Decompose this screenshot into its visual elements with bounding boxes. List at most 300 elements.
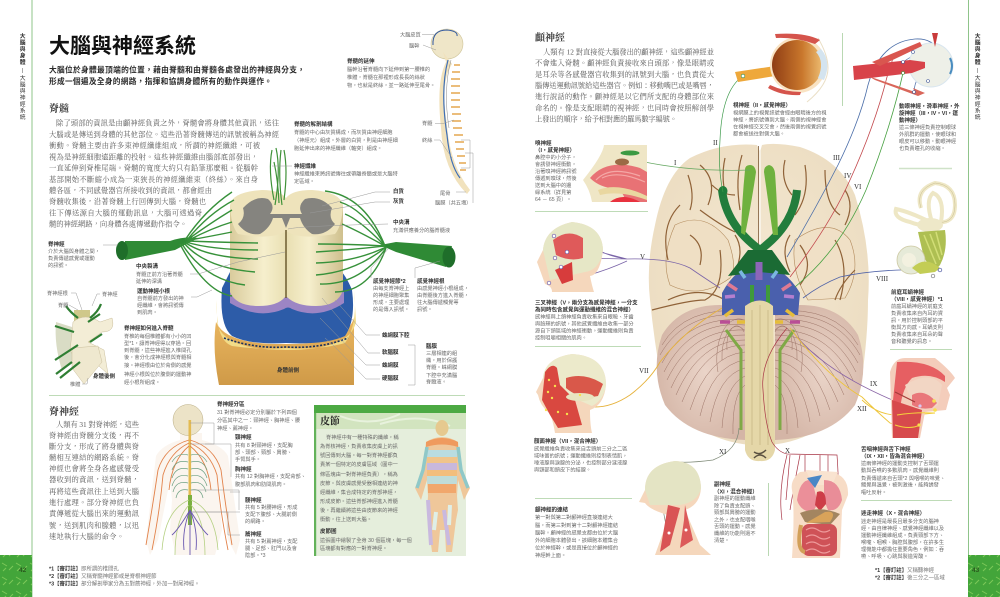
caption: glossopharyngeal: （IX，XII，皆為混合神經）: [861, 452, 928, 460]
page tab 42: 42: [19, 567, 27, 574]
pons: [722, 262, 800, 315]
heading: cranial nerves: 顱神經: [535, 31, 565, 44]
caption: anterior fissure: 脊髓正前方沿著脊髓: [136, 270, 183, 278]
caption: trigeminal: 感神經與上頜神經負責收集來自眼瞼、牙齒: [535, 312, 634, 320]
thoracic: 腹部肌肉和肋間肌肉。: [235, 480, 287, 488]
text: spinal nerves: 再將這些資訊往上送到大腦: [49, 487, 140, 496]
caption: white matter, grey matter, central canal: 中央溝: [393, 218, 410, 226]
caption: accessory nerve: 舌頭的運動。感覺: [714, 522, 756, 530]
left sidebar: [0, 0, 32, 597]
text: spinal cord: 視為是神經細胞遠距離的投射。這些神經纖維由腦部底部發出，: [49, 152, 258, 162]
panel: dermatomes: [314, 405, 470, 556]
thoracic: 胸神經: [235, 465, 252, 473]
text: spinal nerves: 進行處理。部分脊神經也負: [49, 498, 140, 507]
caption: sensory ganglion: [371, 248, 410, 313]
caption: olfactory nerve: （I，感覺神經）: [535, 146, 575, 154]
cord column: [230, 205, 343, 306]
sidebar chapter label left: 經: [20, 100, 26, 108]
caption: oculomotor: 這三條神經負責控制眼球: [899, 123, 957, 131]
caption: dermatome figure: 這張圖中繪製了全身 30 個區塊，每一個: [320, 536, 412, 544]
caption: meninges labels: 織，用於保護: [426, 356, 458, 364]
vertebral tissue: [215, 318, 354, 385]
label: body front: 身體前側: [277, 366, 300, 374]
caption: sensory ganglion: 的是傳入訊號。: [373, 305, 409, 313]
sacral: 共有 5 對薦神經，支配: [245, 537, 298, 545]
caption: meninges labels: 蛛網膜下腔: [382, 331, 410, 339]
caption: nerve fibers: 定區域。: [294, 177, 315, 185]
illustration: side view of spine and brain: [400, 29, 473, 206]
thoracic: [235, 465, 306, 488]
right sidebar: [968, 0, 1000, 597]
cerebrum: [649, 144, 869, 445]
caption: cranial connections: 外的細胞本體發出，該細胞本體集合: [535, 536, 619, 544]
caption: dermatome figure: 皮節圖: [320, 527, 337, 535]
footnotes left: *2【審訂註】又稱脊髓神經節或是脊根神經節: [49, 572, 157, 580]
caption: nerve fibers: 神經纖維: [294, 162, 317, 170]
roman numeral labels: XII: [857, 405, 867, 413]
VII: [580, 308, 722, 407]
caption: vagus: 經，由自律神經、感覺神經纖維以及: [861, 524, 944, 532]
text: dermatomes: 經纖維，集合成特定的脊部神經，: [320, 488, 398, 496]
caption: trigeminal: [535, 298, 638, 342]
grey matter: [238, 198, 335, 234]
X: [763, 328, 838, 527]
text: spinal nerves: 速地執行大腦的命令。: [49, 532, 124, 541]
heading: spinal nerves: 脊神經: [49, 405, 79, 418]
illustration: throat: [890, 358, 955, 438]
caption: accessory nerve: （XI，混合神經）: [714, 488, 758, 496]
text: cranial nerves: 人類有 12 對直接從大腦發出的顱神經，這些顱神經並: [543, 48, 714, 56]
caption: motor rootlets: 自脊髓前方發出的神: [137, 294, 184, 302]
caption: facial nerve: 感覺纖維負責收集來自舌頭前三分之二區: [534, 444, 627, 452]
illustration: brain underside: [649, 144, 869, 461]
footnotes left: [49, 564, 200, 588]
I: [640, 161, 750, 170]
illustration: neck head: [639, 461, 711, 555]
sidebar chapter label right: 腦: [975, 38, 981, 46]
caption: motor rootlets: 運動神經小根: [137, 287, 171, 295]
dorsal rootlets: [270, 148, 286, 205]
footnotes left: *1【審訂註】即所謂的椎間孔: [49, 564, 119, 572]
caption: vestibulocochlear: 前庭耳蝸神經: [891, 288, 925, 296]
nerve connector lines: [549, 39, 940, 540]
labels: vertebra: 身體後側: [93, 372, 116, 380]
caption: cranial connections: 腦幹。顱神經的感覺支都由位於大腦: [535, 528, 618, 536]
caption: spinal cord extension: 腦幹沿著脊髓向下延伸到第一腰椎的: [347, 65, 430, 73]
title: 大腦與神經系統: [49, 34, 196, 58]
caption: accessory nerve: 除了負責支配頭、: [714, 502, 756, 510]
olfactory nerves: [741, 165, 778, 235]
roman numeral labels: VI: [854, 183, 862, 191]
cervical: 頸神經: [235, 433, 252, 441]
caption: facial nerve: 域味蕾的訊號；運動纖維則控制表情肌，: [534, 452, 627, 460]
caption: white matter, grey matter, central canal: [288, 187, 451, 234]
roman numeral labels: III: [833, 154, 841, 162]
captions: spinal nerve regions: [217, 400, 306, 559]
caption: how nerves enter: 後，會分化成神經根與脊髓相: [124, 353, 191, 361]
roman numeral labels: VII: [639, 367, 649, 375]
labels: spine: 脊髓: [422, 119, 432, 127]
footnotes left: *3【審訂註】部分解剖學家分為五對薦神經，外加一對尾神經。: [49, 580, 200, 588]
caption: dermatome figure: [320, 527, 412, 552]
text: spinal cord: 體各區，不同感覺器官所接收到的資訊，都會經由: [49, 186, 212, 195]
caption: spinal nerve: 介於大腦與身體之間，: [48, 247, 100, 255]
caption: accessory nerve: 纖維的功能則還不: [714, 529, 756, 537]
caption: anatomy of cord: [294, 120, 398, 152]
text: spinal cord: 大腦或是傳送到身體的其他部位。這些沿著脊髓傳送的訊號被稱為神經: [49, 130, 280, 139]
caption: glossopharyngeal: 負責傳遞來自舌頭*2 與咽喉的味覺、: [861, 474, 945, 482]
caption: vagus: 嚥、呼吸、心跳與製造胃酸。: [861, 552, 928, 560]
caption: glossopharyngeal: 嘔吐反射。: [861, 488, 887, 496]
caption: trigeminal: 為同時包含感覺與運動纖維的混合神經）: [535, 306, 634, 314]
caption: meninges labels: 脊髓。蛛網膜: [426, 363, 457, 371]
caption: how nerves enter: 脊椎的每個椎體都有小小的凹: [124, 332, 191, 340]
caption: motor rootlets: 經纖維，會將訊號傳: [137, 301, 185, 309]
sulci: [652, 155, 855, 310]
text: cranial nerves: 是耳朵等各感覺器官收集到的訊號到大腦，也負責從大: [535, 70, 715, 79]
caption: vagus: [861, 509, 945, 560]
caption: oculomotor: 外肌群的運動，使眼球和: [899, 130, 956, 138]
caption: meninges labels: 下腔中充滿腦: [426, 371, 457, 379]
footnotes right: *2【審訂註】後三分之一區域: [875, 574, 945, 582]
caption: vestibulocochlear: 音和聽覺的訊息。: [891, 337, 933, 345]
sidebar chapter label right: 大: [975, 74, 981, 82]
sidebar chapter label right: 身: [975, 52, 981, 60]
caption: accessory nerve: 副神經: [714, 480, 731, 488]
text: dermatomes: 後，再繼續將這些由皮節來的神經: [320, 506, 398, 514]
caption: meninges labels: 三層相連的組: [426, 349, 457, 357]
caption: anatomy of cord: 胞延伸出來的神經纖維（軸突）組成。: [294, 144, 382, 152]
lumbar: 支配下腹部、大腿前側: [245, 510, 297, 518]
text: dermatomes: 皮節。與皮膚感覺受器相連結的神: [320, 479, 398, 487]
caption: meninges labels: 脊髓液。: [426, 378, 447, 386]
caption: oculomotor: 旋神經（III，IV，VI，運: [899, 109, 958, 117]
text: spinal cord: 往下傳送源自大腦的運動訊息，大腦可透過脊: [49, 208, 202, 218]
caption: motor rootlets: 到肌肉。: [137, 308, 158, 316]
caption: how nerves enter: 脊神經如何進入脊髓: [124, 324, 174, 332]
caption: sensory ganglion: 由每支脊神經上: [373, 284, 409, 292]
caption: meninges labels: [320, 298, 458, 386]
caption: vestibulocochlear: 負責收集來自耳朵的聲: [891, 330, 943, 338]
sidebar chapter label right: 腦: [975, 80, 981, 88]
caption: spinal cord extension: 椎體，脊髓在那裡形成長長的絲狀: [347, 73, 426, 81]
roman numeral labels: IV: [844, 172, 851, 180]
caption: optic nerve: 視神經（II，感覺神經）: [733, 101, 791, 109]
illustration: head trigeminal: [537, 222, 603, 292]
spinal nerve regions intro: 神經、薦神經。: [217, 424, 253, 432]
caption: accessory nerve: 頸部與肩膀的運動: [714, 508, 756, 516]
text: spinal nerves: 責傳遞從大腦出來的運動訊: [49, 509, 139, 518]
sidebar chapter label left: 腦: [20, 80, 26, 88]
left spinal nerve: [116, 192, 258, 296]
temporal lobes: [666, 220, 734, 291]
caption: olfactory nerve: 傳遞到嗅球，然後: [535, 174, 577, 182]
caption: accessory nerve: 之外，也支配咽喉: [714, 516, 756, 524]
sidebar chapter label right: [975, 32, 981, 121]
sidebar chapter label left: 體: [20, 58, 26, 66]
caption: anatomy of cord: 脊髓的解剖結構: [294, 120, 333, 128]
roman numeral labels: IX: [870, 380, 877, 388]
caption: how nerves enter: 型*1，讓脊神經得以穿過。回: [124, 339, 191, 347]
caption: spinal nerve: 脊神經: [48, 240, 65, 248]
caption: optic nerve: 都會被送往對側大腦。: [733, 130, 785, 138]
roman numeral labels: [639, 139, 889, 456]
caption: glossopharyngeal: 動與吞嚥的多數肌肉。感覺纖維則: [861, 466, 939, 474]
lumbar: 共有 5 對腰神經，形成: [245, 503, 297, 511]
lumbar: [245, 496, 297, 525]
heading: dermatomes: 皮節: [320, 414, 340, 428]
sidebar chapter label left: 神: [20, 94, 26, 102]
caption: vestibulocochlear: 前庭耳蝸神經的前庭支: [891, 302, 943, 310]
caption: vestibulocochlear: 負責收集來自內耳的資: [891, 309, 943, 317]
caption: spinal cord extension: [347, 57, 435, 89]
optic chiasm and tracts: [722, 190, 797, 250]
caption: vestibulocochlear: （VIII，感覺神經）*1: [891, 295, 943, 303]
caption: spinal nerve: [48, 240, 118, 269]
caption: how nerves enter: 到脊髓，這些神經進入椎間孔: [124, 346, 192, 354]
text: spinal nerves: 器收到的資訊，送到脊髓，: [49, 475, 139, 484]
cerebellum: [657, 305, 745, 440]
caption: oculomotor: 也負責瞳孔的收縮。: [899, 144, 946, 152]
caption: sensory ganglion: 形成，主要處理: [373, 298, 410, 306]
caption: vagus: 迷走神經（X，混合神經）: [861, 509, 925, 517]
caption: glossopharyngeal: 舌咽神經與舌下神經: [861, 445, 911, 453]
caption: sensory root: [415, 261, 469, 313]
brainstem: [745, 300, 775, 461]
caption: anterior fissure: 中央裂溝: [136, 262, 159, 270]
cervical: 手臂與手。: [235, 455, 261, 463]
text: cranial nerves: 進行說話的動作。顱神經是以它們所支配的身體部位來: [535, 92, 715, 101]
illustration: spinal cord cross-section: [116, 148, 456, 385]
caption: anterior fissure: 延伸的深溝: [136, 277, 162, 285]
text: dermatomes: 責某一個特定的皮膚區域（圖中一: [320, 460, 398, 468]
caption: motor rootlets: [137, 287, 212, 316]
labels: spine: [400, 30, 473, 206]
text: spinal cord: [49, 118, 280, 228]
caption: glossopharyngeal: 觸覺與溫覺，被刺激後，能夠誘發: [861, 480, 939, 488]
caption: cranial connections: 位於神經幹，或是直接位於顱神經的: [535, 544, 618, 552]
caption: olfactory nerve: 會誘發神經衝動，: [535, 160, 577, 168]
sidebar chapter label right: 與: [975, 45, 981, 53]
intro text: [49, 64, 305, 86]
caption: oculomotor: 動眼神經，滑車神經，外: [899, 102, 960, 110]
lumbar: 的網路。: [245, 517, 266, 525]
footnotes right: [875, 566, 945, 582]
caption: anatomy of cord: （神經元）組成。外層的白質，則是由神經細: [294, 136, 398, 144]
roman numeral labels: VIII: [876, 275, 889, 283]
cervical: 部、頭部、頸部、肩膀、: [235, 448, 292, 456]
spinal nerve regions intro: 分區其中之一：頸神經、胸神經、腰: [217, 416, 300, 424]
sidebar chapter label right: 經: [975, 100, 981, 108]
illustration: eye optic: [735, 34, 828, 102]
captions: spinal cord left: [48, 240, 285, 386]
caption: nerve fibers: 神經纖維束將訊號傳往或帶離脊髓或是大腦特: [294, 170, 398, 178]
illustration: eye muscles: [853, 33, 953, 96]
caption: cranial connections: 第一對與第二對顱神經直接連結大: [535, 513, 613, 521]
caption: oculomotor: 動神經）: [899, 116, 921, 124]
caption: olfactory nerve: 緣系統（詳見第: [535, 188, 571, 196]
caption: optic nerve: 神經，將訊號傳到大腦。兩側的視神經會: [733, 116, 827, 124]
thoracic: 共有 12 對胸神經，支配背部、: [235, 472, 306, 480]
text: spinal nerves: 斷分支，形成了將身體與脊: [49, 442, 139, 451]
IX: [790, 328, 897, 402]
roman numeral labels: X: [785, 447, 790, 455]
caption: anatomy of cord: 脊髓的中心由灰質構成，而灰質由神經細胞: [294, 128, 393, 136]
pia band: [230, 292, 344, 313]
cervical: [235, 433, 293, 463]
caption: meninges labels: 軟腦膜: [382, 348, 399, 356]
caption: olfactory nerve: 送到大腦中的邊: [535, 181, 572, 189]
text: spinal nerves: 號，送到肌肉和腺體，以迅: [49, 521, 140, 530]
caption: glossopharyngeal: 這兩條神經的運動支控制了舌頭運: [861, 459, 940, 467]
text: dermatomes: 脊神經中有一種特殊的纖維，稱: [326, 433, 399, 441]
sidebar chapter label left: [20, 32, 26, 121]
text: spinal nerves: 人類有 31 對脊神經，這些: [56, 420, 139, 429]
caption: nerve fibers: [272, 162, 398, 185]
labels: vertebra: 脊神經根: [47, 289, 68, 297]
V: [549, 236, 720, 288]
lumbar: 腰神經: [245, 496, 262, 504]
text: cranial nerves: 不會進入脊髓。顱神經負責接收來自頭部，像是眼睛或: [535, 58, 715, 68]
caption: optic nerve: [733, 101, 827, 138]
caption: anterior fissure: [136, 252, 285, 285]
caption: vagus: 理機能中都擔任重要角色，例如：吞: [861, 545, 945, 553]
text: spinal cord: 脊髓收集後，沿著脊髓上行回傳到大腦，脊髓也: [49, 197, 206, 206]
caption: spinal nerve: 的訊號。: [48, 261, 69, 269]
caption: vestibulocochlear: 衡與方向感。耳蝸支則: [891, 323, 943, 331]
text: dermatomes: 形成皮節。這些脊部神經進入脊髓: [320, 497, 398, 505]
caption: accessory nerve: [714, 480, 758, 544]
sidebar chapter label left: 統: [20, 113, 26, 121]
sidebar chapter label right: 神: [975, 94, 981, 102]
caption: how nerves enter: 接。神經根由位於背側的感覺: [124, 361, 191, 369]
heading: spinal cord: 脊髓: [49, 102, 69, 115]
caption: spinal cord extension: 脊髓的延伸: [347, 57, 375, 65]
II: [719, 76, 743, 192]
text: spinal nerves: 脊神經由脊髓分支後，再不: [49, 431, 140, 440]
caption: spinal cord extension: 物，也就是終絲，並一路延伸至尾骨。: [347, 81, 435, 89]
caption: olfactory nerve: 鼻腔中的小分子，: [535, 153, 577, 161]
caption: facial nerve: 顏面神經（VII，混合神經）: [534, 437, 601, 445]
VI: [795, 73, 903, 287]
caption: how nerves enter: 經小根所組成。: [124, 378, 160, 386]
sidebar chapter label left: 身: [20, 52, 26, 60]
sidebar chapter label right: 系: [975, 106, 981, 114]
caption: facial nerve: 與頸部和頭皮下的結腺。: [534, 466, 591, 474]
sidebar chapter label left: 與: [20, 45, 26, 53]
labels: vertebra: 椎體: [70, 380, 80, 388]
text: spinal cord: 一直延伸到脊椎尾端。脊髓的寬度大約只有鉛筆那麼粗。從腦幹: [49, 164, 259, 172]
caption: olfactory nerve: 64 － 65 頁）。: [535, 196, 572, 203]
caption: sensory ganglion: 的神經細胞聚集: [373, 291, 409, 299]
caption: trigeminal: 控制咀嚼相關的肌肉。: [535, 334, 587, 342]
illustration: nose: [583, 145, 647, 202]
text: spinal cord: 衝動。脊髓主要由許多束神經纖維組成，所謂的神經纖維，可被: [49, 141, 261, 150]
text: spinal nerves: 神經也會將全身各處感覺受: [49, 464, 140, 473]
caption: sensory root: 感覺神經根: [417, 277, 445, 285]
labels: spine: 終絲: [422, 136, 432, 144]
sidebar chapter label right: 大: [975, 32, 981, 40]
text: spinal cord: 髓的神經網路，向身體各處傳遞動作指令。: [49, 220, 187, 228]
caption: accessory nerve: 清楚。: [714, 536, 730, 544]
caption: facial nerve: 唾液腺與淚腺的分泌，也控制部分涎液腺: [534, 458, 627, 466]
caption: vagus: 迷走神經是最長且最多分支的腦神: [861, 517, 939, 525]
caption: cranial connections: 神經幹上面。: [535, 551, 566, 559]
caption: olfactory nerve: [535, 139, 577, 203]
sacral: 腿、足部、肛門以及會: [245, 544, 298, 552]
caption: olfactory nerve: 嗅神經: [535, 139, 552, 147]
sacral: [245, 530, 298, 559]
footnotes right: *1【審訂註】又稱聽神經: [875, 566, 935, 574]
sidebar chapter label left: 腦: [20, 38, 26, 46]
illustration: inner ear: [896, 183, 955, 278]
caption: glossopharyngeal: [861, 445, 945, 496]
sacral: 陰部。*3: [245, 551, 266, 559]
caption: meninges labels: 蛛網膜: [382, 361, 399, 369]
sacral: 薦神經: [245, 530, 262, 538]
caption: white matter, grey matter, central canal: 白質: [393, 187, 405, 195]
caption: white matter, grey matter, central canal: 灰質: [393, 197, 405, 205]
caption: spinal nerve: 負責傳遞感覺或運動: [48, 254, 95, 262]
text: dermatomes: [320, 433, 399, 523]
roman numeral labels: XI: [719, 448, 727, 456]
intro text: 大腦位於身體最頂端的位置，藉由脊髓和由脊髓各處發出的神經與分支，: [49, 64, 305, 74]
caption: how nerves enter: [124, 324, 192, 386]
accessory nerves: [726, 330, 794, 430]
caption: accessory nerve: 副神經的運動纖維: [714, 494, 756, 502]
caption: sensory root: 由感覺神經小根組成，: [417, 284, 469, 292]
caption: trigeminal: 與臉頰的訊號，其他感覺纖維由收集一部分: [535, 320, 634, 328]
cervical: 共有 8 對頸神經，支配胸: [235, 441, 293, 449]
caption: sensory ganglion: 感覺神經節*2: [373, 277, 406, 285]
caption: white matter, grey matter, central canal: 充滿供應養分的腦脊髓液: [393, 226, 451, 234]
III: [787, 39, 937, 257]
text: spinal nerves: [49, 420, 140, 541]
sidebar chapter label right: 體: [975, 58, 981, 66]
caption: oculomotor: 眼皮可以移動。動眼神經: [899, 137, 956, 145]
IV: [790, 58, 893, 277]
text: spinal nerves: 髓相互連結的網路系統。脊: [49, 453, 139, 462]
caption: facial nerve: [534, 437, 627, 474]
labels: vertebra: 脊髓: [58, 301, 68, 309]
sidebar chapter label right: 與: [975, 87, 981, 95]
roman numeral labels: II: [713, 139, 718, 147]
right spinal nerve: [316, 191, 456, 292]
caption: vagus: 喉嚨、咽喉、胸腔與腹部，在許多生: [861, 538, 944, 546]
sidebar chapter label left: 大: [20, 32, 26, 40]
caption: sensory root: 由脊髓後方進入脊髓，: [417, 291, 469, 299]
text: cranial nerves: 上發出的順序，給予相對應的羅馬數字編號。: [535, 114, 677, 124]
caption: meninges labels: 腦膜: [426, 342, 438, 350]
sidebar chapter label right: 統: [975, 113, 981, 121]
text: spinal cord: 基部開始不斷縮小成為一束狹長的神經纖維束（終絲）。來自身: [49, 175, 258, 184]
roman numeral labels: V: [640, 253, 645, 261]
page tab 43: 43: [972, 567, 980, 574]
caption: optic nerve: 在視神經交叉交會，然後兩側的視覺訊號: [733, 122, 827, 130]
caption: sensory root: 往大腦傳遞觸覺等: [417, 298, 459, 306]
text: spinal cord: 除了頭部的資訊是由顱神經負責之外，脊髓會將身體其他資訊，送往: [56, 118, 280, 128]
text: dermatomes: 條區塊由一對脊神經負責），稱為: [320, 470, 398, 478]
labels: vertebra: [47, 289, 118, 388]
sidebar chapter label left: 與: [20, 87, 26, 95]
caption: how nerves enter: 神經小根與位於腹側的運動神: [124, 370, 191, 378]
caption: olfactory nerve: 沿著嗅神經將訊號: [535, 167, 577, 175]
text: dermatomes: 號回傳到大腦。每一對脊神經都負: [320, 451, 398, 459]
caption: cranial connections: [535, 506, 619, 559]
text: dermatomes: 為脊核神經，負責收集皮膚上的訊: [320, 442, 399, 450]
XI: [662, 428, 739, 540]
nerve stubs: [720, 262, 800, 322]
